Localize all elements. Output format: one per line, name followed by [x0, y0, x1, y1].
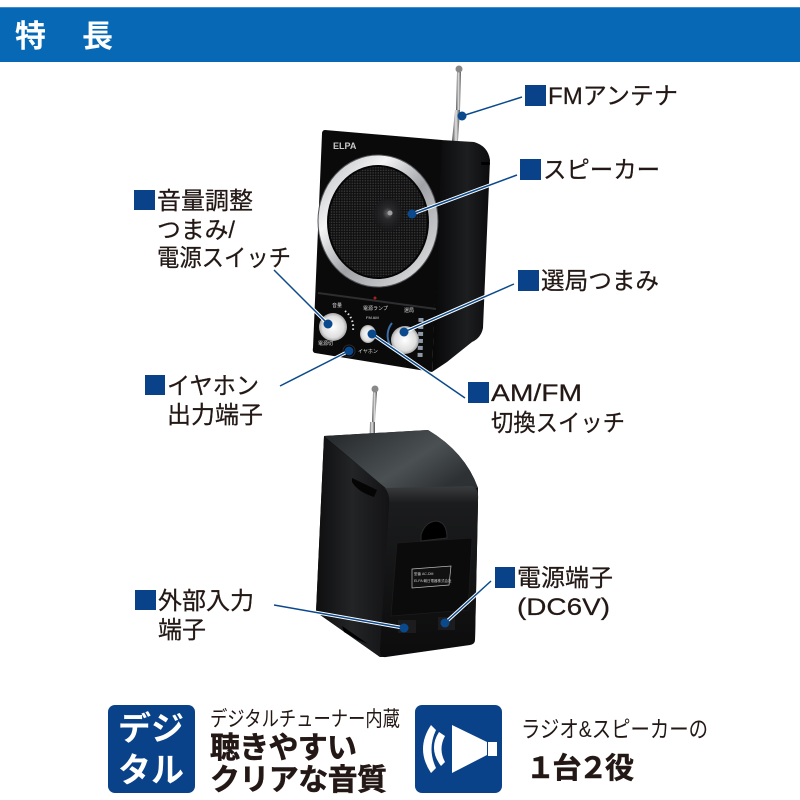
label: speaker: スピーカー [543, 157, 660, 184]
label: power jack: (DC6V) [517, 594, 610, 621]
control panel: 音量 [332, 302, 342, 309]
volume knob [319, 313, 347, 341]
callout dots [324, 112, 466, 632]
radio front face [313, 130, 442, 372]
rear silhouette [316, 430, 478, 657]
label: external input [135, 588, 254, 644]
badge: digital: デジ [118, 710, 184, 747]
label: volume knob: つまみ/ [157, 217, 235, 244]
label: external input: 外部入力 [158, 588, 254, 615]
label: external input: 端子 [158, 617, 206, 644]
side slot [481, 162, 490, 165]
battery cover [391, 538, 472, 616]
rear back [380, 486, 478, 657]
bottom notch [342, 626, 368, 644]
label: volume knob [134, 188, 291, 272]
badge: speaker icon [415, 705, 502, 793]
text: one unit two roles [521, 716, 708, 785]
radio rear view [316, 386, 478, 657]
speaker [318, 155, 438, 287]
external jack [398, 620, 416, 633]
control panel: 電源ランプ [363, 305, 388, 312]
badge: digital [108, 705, 195, 793]
rating label: ELPA 朝日電器株式会社 [414, 578, 452, 583]
radio side [432, 140, 490, 372]
text: digital tuner: デジタルチューナー内蔵 [210, 708, 400, 731]
label: volume knob: 電源スイッチ [157, 245, 291, 272]
rear side [316, 437, 388, 657]
label: power jack [495, 565, 613, 621]
label: FM antenna: FMアンテナ [548, 83, 678, 110]
label: earphone: イヤホン [167, 373, 259, 400]
text: one unit two roles: ラジオ&スピーカーの [521, 716, 708, 742]
label: AM/FM switch: AM/FM [491, 380, 582, 407]
logo: ELPA [333, 141, 357, 151]
rating label [412, 566, 452, 588]
rating label: 型番 AC-DM [414, 571, 434, 576]
label: AM/FM switch [468, 380, 625, 437]
text: digital tuner: 聴きやすい [210, 732, 357, 765]
leader lines [274, 97, 522, 628]
label: volume knob: 音量調整 [157, 188, 253, 215]
header band [0, 7, 800, 62]
control panel: 電源切 [318, 340, 333, 347]
text: one unit two roles: １台２役 [526, 752, 634, 785]
label: AM/FM switch: 切換スイッチ [491, 410, 625, 437]
am/fm switch [360, 325, 376, 343]
label: tuning knob: 選局つまみ [541, 268, 659, 295]
radio front view [313, 66, 490, 372]
label: earphone: 出力端子 [167, 402, 263, 429]
rear top [324, 430, 478, 490]
control panel [318, 293, 436, 358]
antenna [452, 66, 462, 141]
earphone jack [343, 345, 355, 357]
badge: digital: タル [118, 752, 184, 790]
control panel: イヤホン [358, 349, 378, 355]
power jack [438, 617, 455, 630]
label: earphone [145, 373, 263, 429]
header title: 特 長 [15, 19, 113, 54]
side grip [352, 478, 377, 497]
control panel: 選局 [404, 307, 414, 314]
rear antenna [369, 386, 378, 458]
control panel: FM AM [366, 315, 379, 320]
label: power jack: 電源端子 [517, 565, 613, 592]
tuning knob [391, 326, 419, 354]
cover notch [421, 521, 447, 541]
text: digital tuner: クリアな音質 [210, 764, 387, 797]
text: digital tuner [210, 708, 400, 797]
